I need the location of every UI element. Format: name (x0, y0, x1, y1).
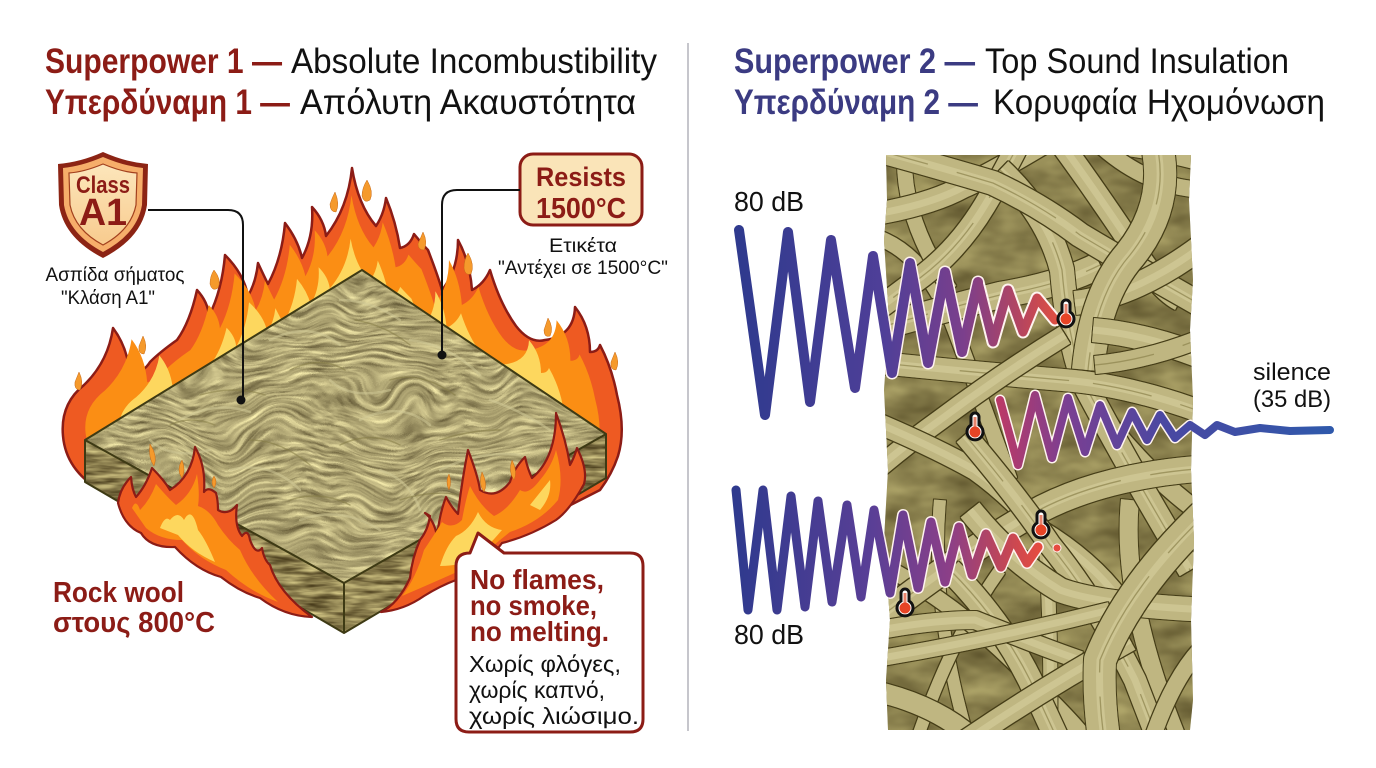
heading: superpower 2: Υπερδύναμη 2 — (734, 83, 978, 122)
label: rock wool at 800C: στους 800°C (53, 607, 215, 639)
slab faces (80, 430, 610, 640)
caption: shield label: Ασπίδα σήματος (46, 265, 184, 286)
embers (75, 180, 618, 492)
label: silence 35 dB: (35 dB) (1253, 386, 1331, 413)
label: silence 35 dB (1253, 359, 1331, 413)
callout: no flames, no smoke, no melting: χωρίς λιώσιμο. (469, 703, 639, 729)
label: 80 dB bottom: 80 dB (734, 619, 804, 650)
callout: no flames, no smoke, no melting: No flames, (470, 564, 604, 595)
heading: superpower 2: Top Sound Insulation (985, 42, 1289, 81)
callout: no flames, no smoke, no melting: no melting. (470, 616, 609, 647)
callout: no flames, no smoke, no melting (456, 533, 643, 732)
heading: superpower 1 (45, 42, 657, 122)
sound wave: middle, exits as silence (1000, 395, 1330, 465)
caption: 1500C label: "Αντέχει σε 1500°C" (498, 258, 668, 279)
badge: Class A1 shield (58, 152, 148, 258)
badge: Class A1 shield: Class (76, 172, 130, 199)
badge: Resists 1500°C: Resists (536, 162, 626, 192)
heading: superpower 1: Absolute Incombustibility (291, 42, 657, 81)
caption: shield label (46, 265, 184, 309)
badge: Class A1 shield: A1 (79, 192, 127, 234)
panel: rock wool fibre cross-section (884, 155, 1194, 730)
connector: 1500C label to slab (438, 190, 520, 360)
sound wave: bottom, 80 dB damped at fibres (736, 490, 1061, 610)
callout: no flames, no smoke, no melting: no smoke, (470, 590, 597, 621)
label: rock wool at 800C: Rock wool (53, 577, 184, 609)
icon: thermometer 3 (1033, 511, 1049, 538)
callout: no flames, no smoke, no melting: Χωρίς φλόγες, (469, 651, 621, 677)
sound wave: top, 80 dB damped at fibres (739, 230, 1055, 415)
front left flame (118, 447, 312, 617)
slab top (70, 255, 620, 633)
front right flame (381, 413, 585, 612)
heading: superpower 1: Superpower 1 — (45, 42, 282, 81)
label: rock wool at 800C (53, 577, 215, 639)
badge: Resists 1500°C (520, 154, 642, 225)
caption: 1500C label (498, 236, 668, 279)
label: silence 35 dB: silence (1253, 359, 1331, 386)
icon: thermometer 1 (1058, 300, 1074, 327)
badge: Resists 1500°C: 1500°C (536, 193, 626, 225)
callout: no flames, no smoke, no melting: χωρίς καπνό, (469, 677, 605, 703)
heading: superpower 2: Superpower 2 — (734, 42, 975, 81)
back flames (63, 168, 622, 620)
icon: thermometer 4 (897, 589, 913, 616)
icon: thermometer 2 (967, 413, 983, 440)
caption: shield label: "Κλάση Α1" (61, 288, 155, 309)
label: 80 dB top: 80 dB (734, 186, 804, 217)
caption: 1500C label: Ετικέτα (549, 236, 617, 257)
heading: superpower 1: Υπερδύναμη 1 — (45, 83, 290, 122)
connector: shield to slab (148, 210, 246, 404)
heading: superpower 2 (734, 42, 1325, 122)
heading: superpower 2: Κορυφαία Ηχομόνωση (993, 83, 1325, 122)
heading: superpower 1: Απόλυτη Ακαυστότητα (300, 83, 636, 122)
illustration: burning rock wool slab (63, 168, 622, 640)
